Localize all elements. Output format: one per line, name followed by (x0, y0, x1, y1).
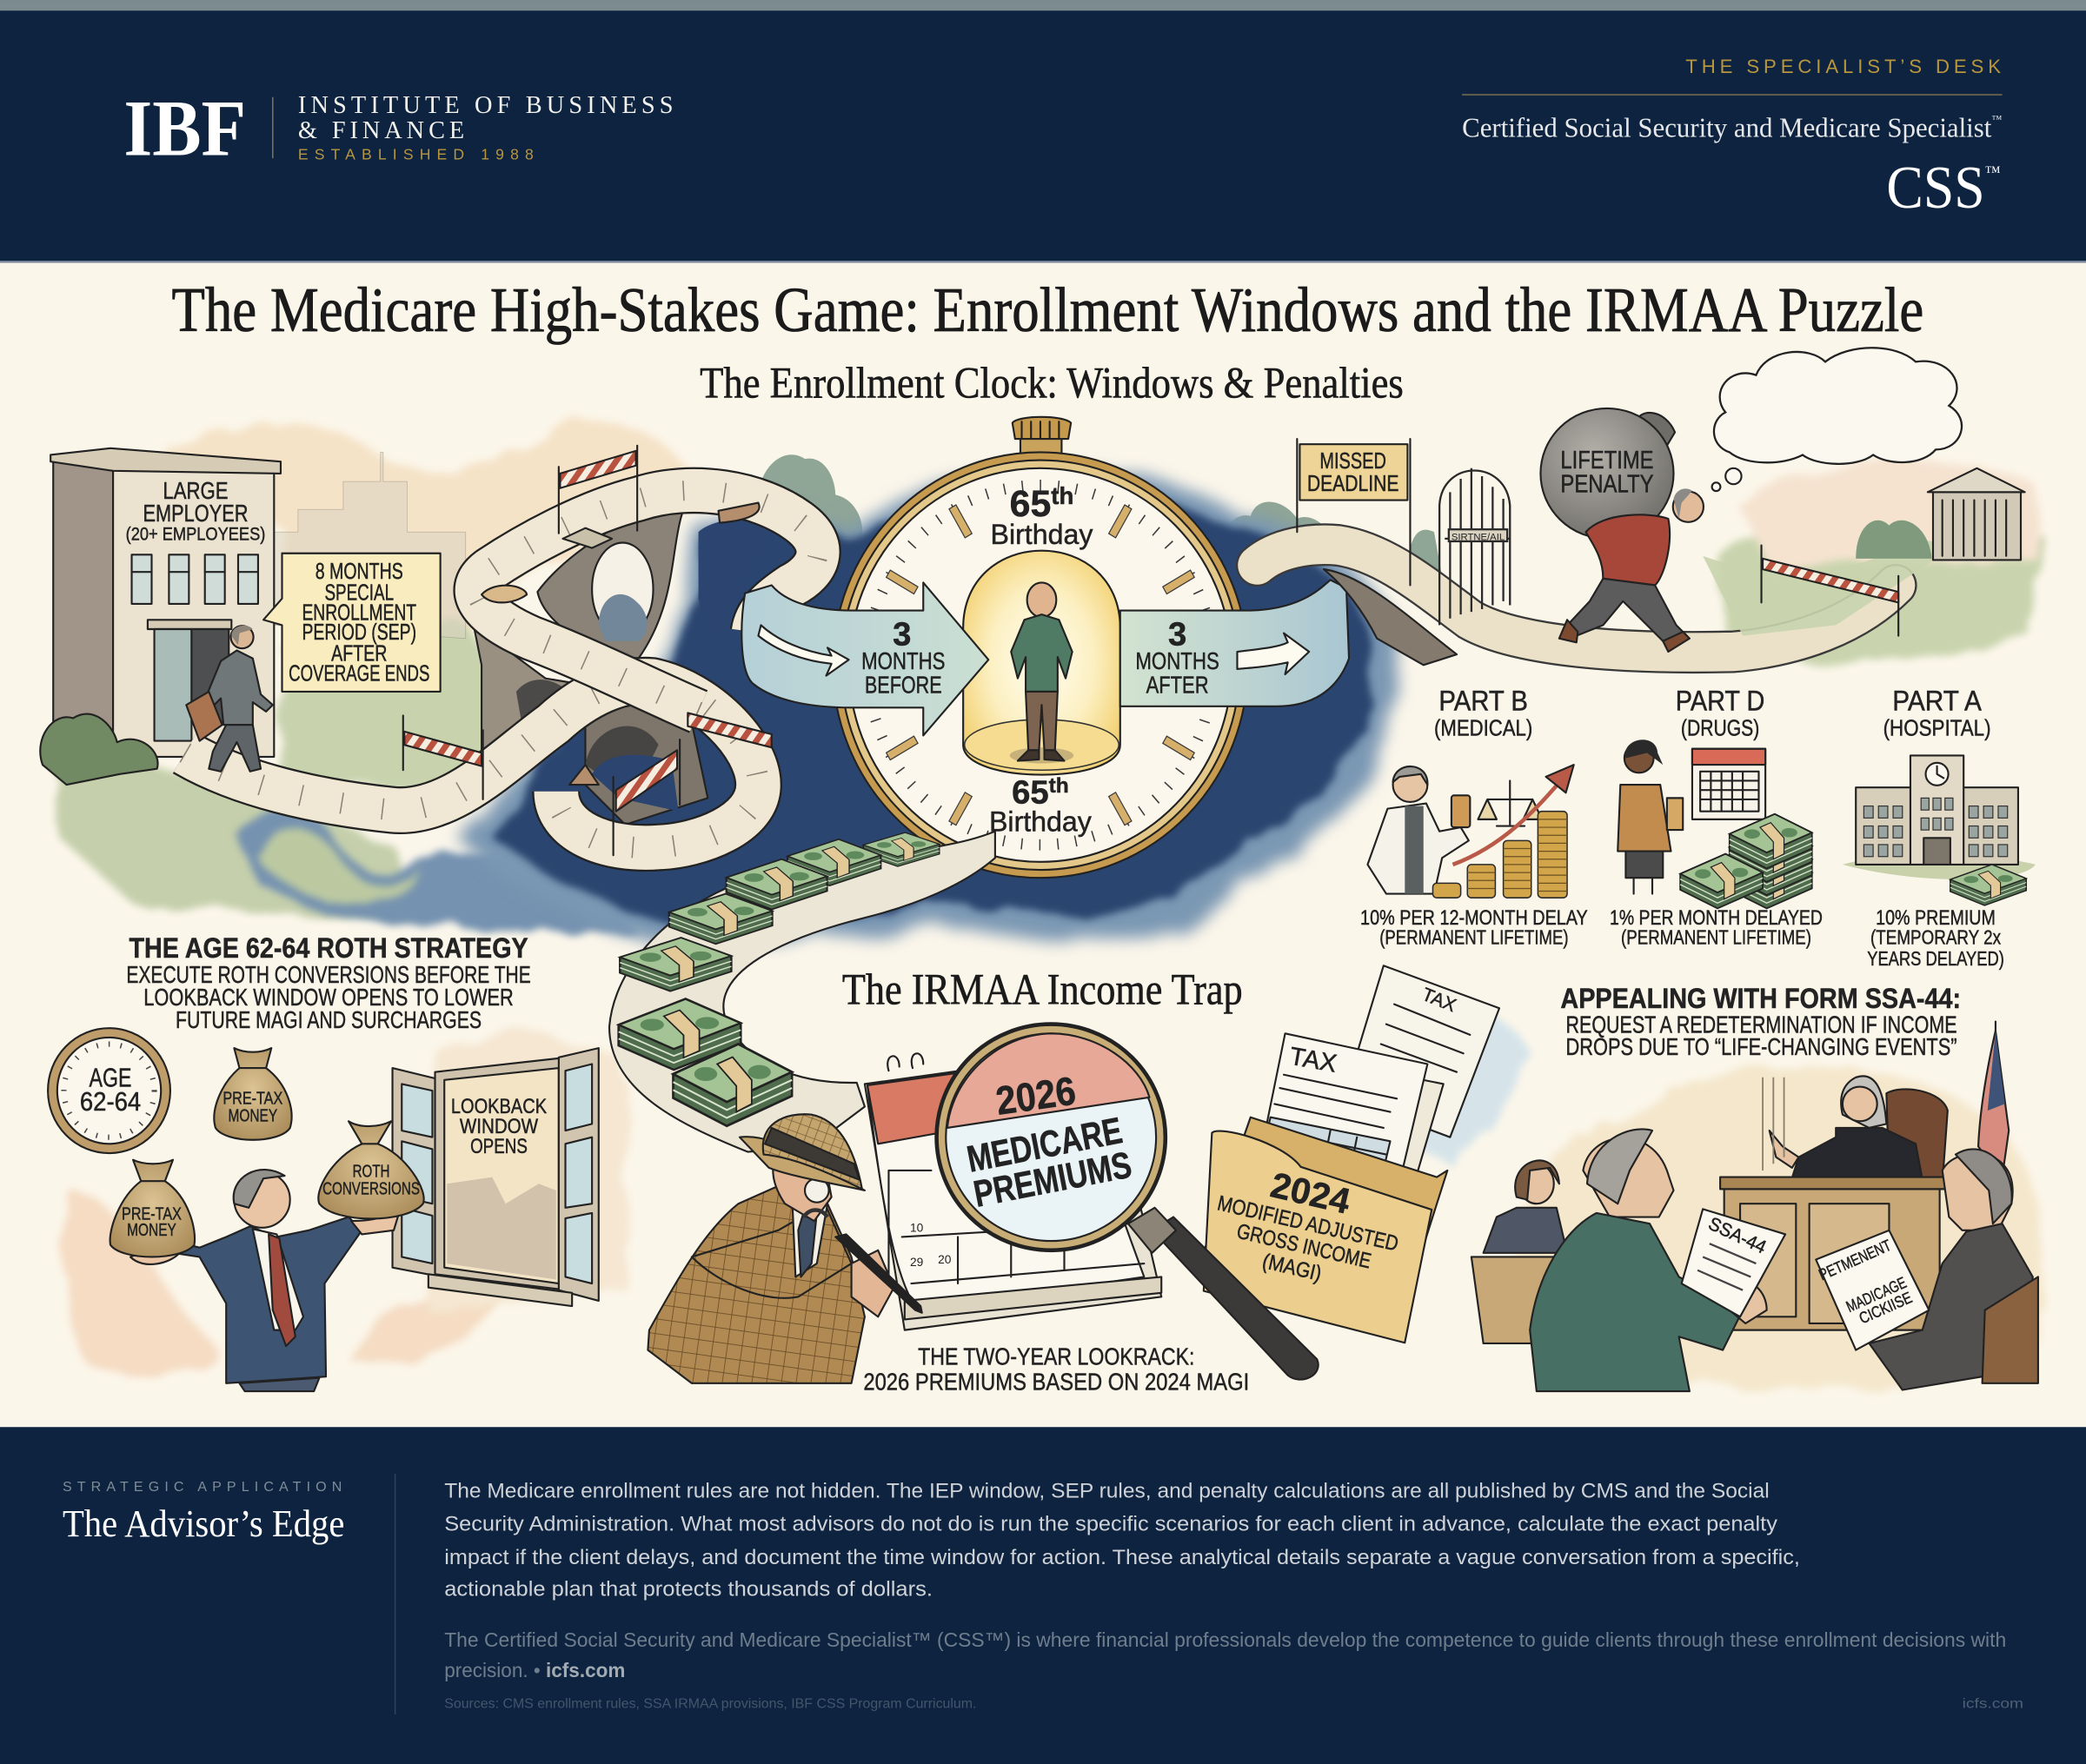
road after deadline (1257, 539, 1956, 665)
front tax form (1251, 1033, 1444, 1250)
man carrying lifetime penalty weight: PENALTY (1560, 470, 1654, 498)
calendar (865, 1051, 1161, 1330)
calendar: 20 (938, 1253, 952, 1266)
heading column: Part A: (HOSPITAL) (1883, 714, 1991, 740)
open window (393, 1048, 599, 1306)
header right: specialist desk: CSS (1886, 154, 1985, 222)
icon: roth bag (318, 1121, 424, 1218)
magnifying glass: PREMIUMS (970, 1144, 1135, 1216)
heading column: Part B: (MEDICAL) (1434, 714, 1532, 740)
road: winding S curve (185, 490, 818, 848)
header right: specialist desk (1462, 56, 2003, 222)
sign: missed deadline: MISSED (1319, 448, 1386, 474)
magnifying glass (937, 1025, 1319, 1380)
callout: 8 month SEP (263, 554, 441, 692)
text: 65th birthday bottom: Birthday (989, 806, 1092, 838)
heading column: Part B (1360, 685, 1588, 949)
icon: pre-tax bag lower (110, 1160, 195, 1257)
text: Roth heading: THE AGE 62-64 ROTH STRATEGY (129, 932, 528, 964)
text: Roth heading: FUTURE MAGI AND SURCHARGES (176, 1006, 482, 1033)
heading: enrollment clock: The Enrollment Clock: Windows & Penalties (700, 359, 1404, 408)
heading column: Part B: PART B (1438, 685, 1528, 716)
icon: roth bag: ROTH (353, 1162, 389, 1182)
footer CSS note: precision. • icfs.com (444, 1659, 625, 1681)
footer body paragraph (444, 1479, 1800, 1602)
icon: age clock: 62-64 (80, 1087, 141, 1117)
icon: pre-tax bag top: MONEY (229, 1105, 277, 1125)
magnifying glass: 2026 (993, 1068, 1079, 1124)
form SSA-44 (1682, 1209, 1785, 1316)
back tax form: TAX (1419, 984, 1459, 1016)
footer left heading: STRATEGIC APPLICATION (63, 1479, 342, 1495)
tree masses (724, 454, 1445, 592)
open window: LOOKBACK (451, 1095, 548, 1118)
callout: 8 month SEP: 8 MONTHS (316, 558, 403, 584)
person leaving building (186, 626, 273, 772)
woman calendar cash (1618, 739, 1812, 908)
footer body paragraph: Security Administration. What most advisors do not do is run the specific scenarios for each client in advance, calculate the exact penalty (444, 1513, 1778, 1536)
header right: specialist desk: ™ (1985, 163, 2001, 181)
money road with cash stacks (609, 832, 995, 1152)
heading column: Part D: (DRUGS) (1681, 714, 1759, 740)
text: part A penalty: 10% PREMIUM (1876, 907, 1996, 930)
far barrier and courthouse (1762, 468, 2025, 636)
logo: IBF (123, 83, 673, 172)
businessman (130, 1170, 402, 1391)
barricades on the road (403, 446, 772, 855)
heading: IRMAA: The IRMAA Income Trap (842, 965, 1243, 1014)
text: 65th birthday top (991, 482, 1093, 550)
text: part D penalty (1610, 907, 1823, 949)
text: two-year lookback: THE TWO-YEAR LOOKRACK: (918, 1343, 1194, 1369)
text: two-year lookback: 2026 PREMIUMS BASED ON 2024 MAGI (863, 1369, 1249, 1396)
man carrying lifetime penalty weight: LIFETIME (1560, 447, 1654, 474)
man on right with document (1870, 1149, 2038, 1390)
magnifying glass: MEDICARE (964, 1110, 1126, 1181)
text: appeal heading: REQUEST A REDETERMINATION IF INCOME (1566, 1011, 1957, 1038)
arrow ribbon: 3 months after: 3 (1168, 615, 1186, 653)
folder 2024 MAGI: 2024 (1267, 1164, 1354, 1222)
footer body paragraph: actionable plan that protects thousands of dollars. (444, 1578, 933, 1602)
arrow ribbon: 3 months before: BEFORE (865, 671, 942, 698)
judge bench (1720, 1177, 1946, 1330)
flag (1978, 1022, 2009, 1177)
folder 2024 MAGI: MODIFIED ADJUSTED (1215, 1191, 1400, 1257)
text: large employer: EMPLOYER (143, 500, 248, 527)
folder 2024 MAGI (1198, 1117, 1447, 1343)
sources: icfs.com (1963, 1696, 2023, 1711)
main cream panel (0, 261, 2086, 1427)
iron gate: SIRTNE/AIL (1452, 532, 1505, 542)
icon: pre-tax bag lower: PRE-TAX (122, 1204, 182, 1224)
panel: appeal with form SSA-44 (1471, 983, 2038, 1391)
callout: 8 month SEP: ENROLLMENT (302, 599, 416, 625)
header right: specialist desk: THE SPECIALIST’S DESK (1685, 56, 2001, 77)
text: 65th birthday bottom (989, 774, 1092, 838)
panel: age 62-64 Roth strategy (48, 932, 599, 1391)
text: appeal heading (1560, 983, 1961, 1060)
text: large employer: LARGE (163, 477, 229, 504)
icon: age clock: AGE (90, 1064, 132, 1093)
text: part D penalty: (PERMANENT LIFETIME) (1621, 926, 1811, 949)
document: medicare notice: PETMENENT (1816, 1236, 1894, 1283)
logo: IBF: IBF (123, 83, 246, 172)
city skyline (274, 452, 466, 639)
judge (1763, 1076, 1948, 1186)
sources: Sources: CMS enrollment rules, SSA IRMAA provisions, IBF CSS Program Curriculum. (444, 1696, 976, 1711)
spotlight dome with person (963, 551, 1120, 775)
heading column: Part D: PART D (1676, 685, 1764, 716)
icon: pre-tax bag top (214, 1048, 292, 1140)
text: Roth heading (126, 932, 531, 1033)
footer band (0, 1427, 2086, 1764)
panel: IRMAA trap illustration (648, 965, 1499, 1396)
text: two-year lookback (863, 1343, 1249, 1396)
front tax form: TAX (1287, 1043, 1339, 1078)
arrow ribbon: 3 months before: MONTHS (861, 647, 945, 674)
footer left heading (63, 1479, 344, 1545)
hospital building (1843, 755, 2036, 905)
back tax form (1344, 965, 1499, 1137)
footer left heading: The Advisor’s Edge (63, 1502, 344, 1545)
footer CSS note (444, 1628, 2006, 1681)
text: 65th birthday top: th (1051, 482, 1073, 509)
stone arches under road (474, 489, 780, 825)
sign: missed deadline (1297, 439, 1410, 585)
icon: pre-tax bag top: PRE-TAX (223, 1088, 282, 1108)
arrow ribbon: 3 months before (741, 582, 988, 735)
logo: IBF: & FINANCE (298, 117, 464, 144)
man in green jacket (1530, 1129, 1767, 1391)
text: part B penalty: 10% PER 12-MONTH DELAY (1360, 907, 1588, 930)
footer CSS note: The Certified Social Security and Medicare Specialist™ (CSS™) is where financial professionals develop the competence to guide clients through these enrollment decisions with (444, 1628, 2006, 1651)
sign: missed deadline: DEADLINE (1307, 470, 1398, 496)
court reporter (1471, 1160, 1567, 1343)
heading column: Part A (1843, 685, 2036, 970)
text: part D penalty: 1% PER MONTH DELAYED (1610, 907, 1823, 930)
header band (123, 56, 2003, 222)
footer body paragraph: The Medicare enrollment rules are not hidden. The IEP window, SEP rules, and penalty calculations are all published by CMS and the Social (444, 1479, 1770, 1502)
text: 65th birthday top: 65 (1010, 483, 1051, 525)
text: appeal heading: APPEALING WITH FORM SSA-44: (1560, 983, 1961, 1014)
calendar: 29 (910, 1256, 923, 1269)
calendar: 10 (910, 1221, 924, 1234)
callout: 8 month SEP: SPECIAL (324, 579, 394, 605)
text: Roth heading: EXECUTE ROTH CONVERSIONS BEFORE THE (126, 961, 531, 988)
callout: 8 month SEP: AFTER (331, 640, 387, 666)
text: part A penalty (1867, 907, 2004, 970)
stopwatch clock (833, 417, 1248, 878)
iron gate (1439, 468, 1510, 625)
text: Roth heading: LOOKBACK WINDOW OPENS TO LOWER (143, 984, 514, 1011)
text: part A penalty: YEARS DELAYED) (1867, 947, 2004, 970)
building: large employer (50, 448, 281, 757)
text: appeal heading: DROPS DUE TO “LIFE-CHANGING EVENTS” (1566, 1033, 1957, 1060)
text: 65th birthday bottom: 65 (1012, 774, 1049, 812)
folder 2024 MAGI: GROSS INCOME (1234, 1220, 1373, 1273)
text: large employer: (20+ EMPLOYEES) (126, 523, 265, 544)
person in sweater (1011, 582, 1073, 761)
text: 65th birthday bottom: th (1049, 774, 1069, 798)
header right: specialist desk: ™ (1991, 113, 2002, 125)
document: medicare notice: MADICAGE (1844, 1273, 1909, 1316)
arrow ribbon: 3 months after (1120, 580, 1349, 706)
logo: IBF: INSTITUTE OF BUSINESS (298, 92, 673, 119)
top accent bar (0, 0, 2086, 10)
detective (648, 1114, 922, 1383)
thought cloud (1712, 348, 1962, 491)
header right: specialist desk: Certified Social Security and Medicare Specialist (1462, 112, 1991, 143)
text: part B penalty: (PERMANENT LIFETIME) (1379, 926, 1569, 949)
form SSA-44: SSA-44 (1705, 1213, 1770, 1258)
heading column: Part D (1610, 685, 1823, 949)
icon: roth bag: CONVERSIONS (322, 1179, 420, 1199)
bushes near door (40, 714, 158, 785)
icon: age clock (48, 1028, 170, 1153)
callout: 8 month SEP: PERIOD (SEP) (302, 619, 416, 645)
arrow ribbon: 3 months before: 3 (893, 615, 911, 653)
document: medicare notice: CICKIISE (1857, 1288, 1915, 1327)
doctor scale arrow coins (1367, 765, 1574, 898)
icon: pre-tax bag lower: MONEY (127, 1220, 176, 1240)
arrow ribbon: 3 months after: MONTHS (1135, 647, 1219, 674)
man carrying lifetime penalty weight (1540, 408, 1704, 652)
heading column: Part A: PART A (1892, 685, 1982, 716)
watercolor backdrop (53, 416, 2042, 1390)
callout: 8 month SEP: COVERAGE ENDS (289, 660, 429, 686)
open window: OPENS (470, 1135, 528, 1158)
logo: IBF: ESTABLISHED 1988 (298, 146, 534, 163)
folder 2024 MAGI: (MAGI) (1260, 1250, 1324, 1286)
arrow ribbon: 3 months after: AFTER (1146, 671, 1209, 698)
document: medicare notice (1816, 1230, 1929, 1350)
text: 65th birthday top: Birthday (991, 519, 1093, 550)
text: part A penalty: (TEMPORARY 2x (1870, 926, 2001, 949)
open window: WINDOW (460, 1115, 539, 1138)
text: part B penalty (1360, 907, 1588, 949)
footer body paragraph: impact if the client delays, and document the time window for action. These analytical details separate a vague conversation from a specific, (444, 1546, 1800, 1569)
text: large employer (126, 477, 265, 544)
sources (444, 1696, 2023, 1711)
